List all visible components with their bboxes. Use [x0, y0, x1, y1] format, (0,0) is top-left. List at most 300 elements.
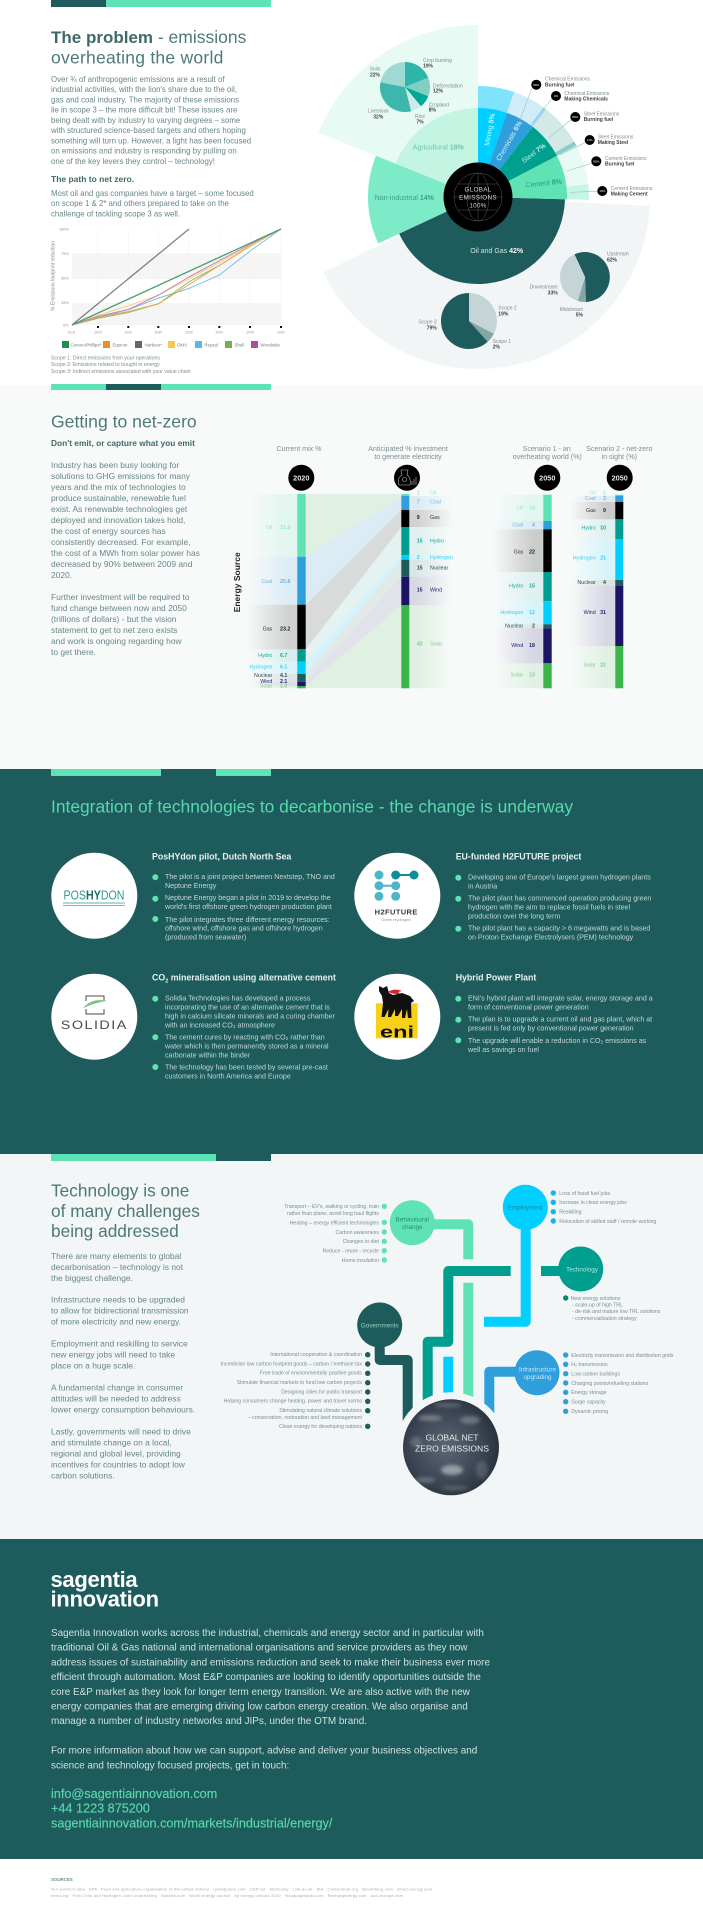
text block: net-zero: to get there. [51, 647, 96, 657]
text block: about sagentia: manage a number of industry networks and JIPs, under the OTM brand. [51, 1716, 367, 1727]
labels: scenario 1 values: Nuclear [505, 623, 524, 629]
labels: 2020 values: Solar [260, 684, 273, 690]
text block: problem intro: on emissions and industry is responding by pulling on [51, 147, 237, 156]
labels: scenario 1 values: 18 [529, 643, 535, 649]
bullets: hybrid power plant: well as savings on fuel [467, 1046, 539, 1054]
title: the problem: - emissions [153, 27, 247, 47]
node: infrastructure upgrading: upgrading [523, 1374, 552, 1381]
heading: PosHYdon: PosHYdon pilot, Dutch North Sea [152, 851, 291, 861]
contact details: +44 1223 875200 [51, 1802, 150, 1816]
text block: challenges: new energy jobs will need to take [51, 1350, 175, 1360]
labels: scenario 2 values: 3 [603, 496, 606, 502]
labels: scenario 1 values: Oil [517, 505, 523, 511]
bullets: CO2 mineralisation: customers in North America and Europe [165, 1072, 291, 1080]
text block: scope definitions: Scope 2: Emissions related to bought in energy [51, 362, 160, 368]
sources [51, 1877, 433, 1898]
bullets: CO2 mineralisation: The technology has been tested by several pre-cast [165, 1063, 328, 1071]
text block: challenges: A fundamental change in consumer [51, 1382, 183, 1392]
centre: global emissions globe [444, 162, 512, 232]
node: governments: Governments [361, 1322, 399, 1329]
labels: scenario 1 values: Coal [512, 522, 523, 528]
list: infrastructure upgrading: Charging points/refueling stations [571, 1381, 649, 1387]
labels: 2020 values: 6.7 [280, 653, 287, 659]
line chart: emissions footprint reduction targets: 2040 [216, 330, 223, 334]
labels: investment values: Coal [430, 499, 441, 505]
icon: investment money bag and bars [398, 470, 416, 485]
leader lines and emission callouts: Cement Emissions [611, 186, 653, 192]
pie: agricultural breakdown: Soils [370, 67, 381, 73]
labels: investment values: 15 [417, 565, 423, 571]
column: scenario 2 [615, 495, 623, 688]
leader lines and emission callouts: Steel Emissions [598, 135, 634, 141]
leader lines and emission callouts: Steel Emissions [584, 112, 620, 118]
pie: scope split: Scope 3 [418, 319, 437, 325]
pie: agricultural breakdown: 7% [416, 120, 424, 126]
bullets: H2FUTURE: production over the long term [468, 912, 560, 920]
column headers [277, 445, 652, 461]
column headers: to generate electricity [374, 453, 442, 461]
labels: investment values: Hydrogen [430, 555, 453, 561]
sector: mining [478, 108, 507, 197]
list: infrastructure upgrading: Dynamic pricing [571, 1409, 608, 1415]
leader lines and emission callouts: Making Cement [611, 191, 648, 197]
list: technology: - de-risk and mature low TRL solutions [572, 1309, 661, 1315]
logo: H2FUTURE: H2FUTURE [375, 907, 417, 916]
bullets: hybrid power plant: present is fed only by conventional power generation [468, 1025, 634, 1033]
year badges: 2050 [612, 473, 628, 482]
text block: about sagentia: Sagentia Innovation works across the industrial, chemicals and energy sector and in particular with [51, 1628, 484, 1639]
bands: 2020 [256, 494, 298, 688]
text block: challenges: Employment and reskilling to service [51, 1339, 188, 1349]
text block: about sagentia: For more information about how we can support, advise and deliver your business objectives and [51, 1746, 477, 1757]
labels: scenario 1 values: 4 [532, 522, 535, 528]
line chart: emissions footprint reduction targets: 2050 [277, 330, 285, 334]
bullets: PosHYdon: world's first offshore green hydrogen production plant [164, 903, 332, 911]
contact details: info@sagentiainnovation.com [51, 1787, 217, 1801]
sources: SOURCES [51, 1877, 73, 1882]
list: technology: - scale-up of high TRL [572, 1302, 623, 1308]
centre: global emissions globe: GLOBAL [464, 186, 492, 193]
labels: 2020 values: Gas [263, 626, 273, 632]
labels: scenario 2 values: Solar [583, 662, 596, 668]
line chart: emissions footprint reduction targets: 75% [61, 252, 69, 256]
sector: cement [478, 156, 567, 199]
sources: irena.org Fuel Cells and Hydrogen Joint Undertaking Statista.com World energy council bp energy outlook 2020 Visualcapitalist.com Rechargenergy.com acci-europe.com [51, 1893, 404, 1898]
line chart: emissions footprint reduction targets: Harbour* [144, 342, 162, 347]
outer ring sectors [478, 86, 589, 200]
bullets: CO2 mineralisation: with an increased CO₂ atmosphere [164, 1021, 275, 1029]
list: governments: Free trade of environmentally positive goods [260, 1371, 362, 1377]
text block: problem intro: being dealt with by industry to varying degrees – some [51, 116, 241, 125]
labels: 2020 values: Nuclear [254, 673, 273, 679]
bullets: PosHYdon: The pilot integrates three different energy resources: [165, 916, 330, 924]
subheading: don't emit: Don't emit, or capture what you emit [51, 438, 195, 448]
labels: scenario 1 values: 13 [529, 673, 535, 679]
pie: oil and gas value chain [530, 252, 629, 319]
leader lines and emission callouts: 15% [599, 189, 606, 193]
labels: scenario 1 values: 15 [529, 583, 535, 589]
leader lines and emission callouts: Chemical Emissions [545, 77, 591, 83]
bands: scenario 2 [576, 496, 616, 688]
list: governments: – conservation, restoration and land management [248, 1415, 363, 1421]
pie: scope split [418, 293, 517, 351]
column headers: Current mix % [277, 445, 322, 453]
list: behavioural change: Transport – EV's, walking or cycling, train [284, 1204, 379, 1210]
bullets: PosHYdon: Neptune Energy [165, 882, 217, 890]
bullets: PosHYdon: (produced from seawater) [165, 934, 246, 942]
text block: challenges: to allow for bidirectional transmission [51, 1306, 189, 1316]
sector: agricultural [395, 108, 478, 197]
pipes [380, 1207, 580, 1430]
text block: problem intro: with structured science-based targets and others hoping [50, 126, 246, 135]
bands: investment [410, 496, 446, 688]
bullets: PosHYdon: Neptune Energy began a pilot in 2019 to develop the [165, 894, 331, 902]
list: infrastructure upgrading [563, 1352, 674, 1415]
list: technology: New energy solutions [571, 1296, 621, 1302]
pie: agricultural breakdown: 8% [429, 108, 436, 114]
node: behavioural change [390, 1200, 435, 1245]
flows: 2020 mix to investment [306, 494, 401, 688]
list: governments: International cooperation & coordination [270, 1352, 362, 1358]
leader lines and emission callouts: 4% [554, 94, 558, 98]
pie: scope split: 19% [498, 311, 509, 317]
node: infrastructure upgrading [514, 1350, 560, 1395]
labels: 2020 values: 1.0 [280, 684, 287, 690]
text block: challenges: lower energy consumption behaviours. [51, 1404, 195, 1414]
line chart: emissions footprint reduction targets: 50% [61, 276, 69, 280]
line chart: emissions footprint reduction targets: 2045 [246, 330, 254, 334]
text block: challenges: decarbonisation – technology is not [51, 1262, 184, 1272]
pie: oil and gas value chain: 33% [548, 290, 558, 296]
list: governments: Stimulate financial markets to fund low carbon projects [237, 1380, 362, 1386]
centre: global emissions globe: EMISSIONS [459, 194, 497, 201]
list: infrastructure upgrading: Low carbon buildings [571, 1372, 620, 1378]
labels: 2020 values: Hydro [258, 653, 272, 659]
heading: CO2 mineralisation: mineralisation using alternative cement [168, 973, 336, 983]
labels: scenario 2 values: 10 [600, 526, 606, 532]
text block: net-zero: deployed and innovation takes hold, [51, 515, 185, 525]
globe: global net zero emissions: ZERO EMISSIONS [415, 1444, 489, 1454]
line chart: emissions footprint reduction targets: Shell [234, 342, 244, 347]
sector labels: Cement 8% [525, 179, 563, 189]
sector: non-industrial [368, 156, 478, 243]
bullets: hybrid power plant: ENI's hybrid plant will integrate solar, energy storage and a [468, 995, 653, 1003]
bullets: H2FUTURE: in Austria [468, 883, 497, 891]
sector labels: Chemicals 6% [495, 119, 524, 162]
panel: hybrid power plant [354, 972, 653, 1060]
text block: net-zero: the cost of energy sources has [51, 526, 166, 536]
labels: 2020 values: Coal [261, 579, 272, 585]
accent bar: section 2 [51, 384, 271, 390]
labels: scenario 1 values: 14 [529, 505, 535, 511]
logo: PosHYdon [51, 853, 137, 939]
pie: scope split: 2% [493, 345, 500, 351]
leader lines and emission callouts: Making Steel [598, 140, 629, 146]
leader lines and emission callouts: Burning fuel [605, 161, 635, 167]
labels: investment values: 42 [417, 642, 423, 648]
labels: 2020 values: 4.1 [280, 673, 287, 679]
sector: steel [478, 127, 557, 197]
bullets: H2FUTURE: Developing one of Europe's largest green hydrogen plants [468, 874, 651, 882]
title: the problem [51, 27, 247, 67]
text block: challenges: carbon solutions. [51, 1470, 115, 1480]
node: governments [357, 1302, 402, 1348]
list: governments: Clean energy for developing nations [279, 1424, 362, 1430]
line chart: emissions footprint reduction targets: Equinor [112, 342, 128, 347]
line chart: emissions footprint reduction targets: Woodside [260, 342, 281, 347]
text block: problem intro: Over ¾ of anthropogenic emissions are a result of [51, 75, 225, 84]
heading: the path to net zero: The path to net zero. [51, 174, 134, 184]
text block: about sagentia: energy companies that are emerging driving low carbon energy creation. We also organise and [51, 1702, 468, 1712]
list: infrastructure upgrading: Electricity transmission and distribution grids [571, 1353, 674, 1359]
bullets: CO2 mineralisation: Solidia Technologies has developed a process [165, 995, 311, 1003]
bullets: PosHYdon: offshore wind, offshore gas and offshore hydrogen [165, 925, 323, 933]
logo: PosHYdon: POSHYDON [64, 888, 124, 902]
logo: sagentia innovation [50, 1567, 159, 1612]
text block: about sagentia: science and technology focused projects, get in touch: [51, 1760, 289, 1771]
pie: agricultural breakdown: Deforestation [433, 83, 463, 89]
bullets: PosHYdon: The pilot is a joint project between Nextstep, TNO and [165, 873, 335, 881]
list: governments: Incentivise low carbon footprint goods – carbon / methane tax [221, 1361, 362, 1367]
bullets: CO2 mineralisation: The cement cures by reacting with CO₂ rather than [165, 1034, 325, 1042]
text block: challenges: place on a huge scale. [51, 1361, 135, 1371]
text block: about sagentia: efficient through automation. Most E&P companies are looking to identify opportunities outside the [51, 1672, 481, 1683]
labels: scenario 1 values: Hydro [509, 583, 523, 589]
list: infrastructure upgrading: H₂ transmission [571, 1362, 608, 1368]
bullets: CO2 mineralisation [152, 995, 336, 1080]
list: behavioural change: Reduce - reuse - recycle [322, 1248, 379, 1254]
pie: scope split: 79% [427, 325, 437, 331]
labels: scenario 1 values: Gas [514, 549, 524, 555]
bullets: PosHYdon [152, 873, 335, 942]
list: behavioural change: rather than plane, avoid long haul flights [287, 1211, 379, 1217]
labels: investment values: Oil [430, 491, 436, 497]
pie: agricultural breakdown: 22% [370, 72, 381, 78]
labels: 2020 values: Hydrogen [249, 665, 272, 671]
text block: net-zero: produce sustainable, renewable fuel [51, 493, 186, 503]
axis label: energy source: Energy Source [232, 552, 242, 612]
leader lines and emission callouts: 96% [533, 83, 540, 87]
line chart: emissions footprint reduction targets [51, 228, 285, 348]
leader lines and emission callouts: Making Chemicals [564, 97, 608, 103]
logo: eni: eni [380, 1022, 414, 1042]
labels: 2020 values: 23.2 [280, 626, 290, 632]
node: technology: Technology [566, 1267, 599, 1274]
labels: scenario 1 values: Solar [511, 673, 524, 679]
panel: H2FUTURE [354, 851, 651, 942]
text block: problem intro: gas and coal industry. The majority of these emissions [51, 95, 239, 104]
leader lines and emission callouts: Cement Emissions [605, 156, 647, 162]
labels: scenario 1 values: 22 [529, 549, 535, 555]
pie: agricultural breakdown [368, 58, 463, 126]
labels: scenario 2 values: 9 [603, 508, 606, 514]
accent bar: section 4 [51, 1154, 271, 1161]
pie: oil and gas value chain: Midstream [560, 307, 583, 313]
text block: problem intro: industrial activities, with the lion's share due to the oil, [51, 85, 237, 94]
labels: scenario 2 values: 22 [600, 662, 606, 668]
leader lines and emission callouts: 89% [572, 115, 579, 119]
text block: net-zero: fund change between now and 2050 [51, 603, 187, 613]
leader lines and emission callouts: Chemical Emissions [564, 91, 610, 97]
sources: Our world in data EPA Food and agriculture organisation of the united nations rystadplane.com CDP.net McKinsey LSE.ac.uk IEA Carbonbrief.org Bloomberg.com smart-energy.com [51, 1886, 433, 1891]
bullets: hybrid power plant: The plan is to upgrade a current oil and gas plant, which at [468, 1016, 652, 1024]
sector labels [375, 112, 563, 255]
node: employment [503, 1185, 548, 1230]
sector labels: Steel 7% [521, 142, 548, 165]
text block: challenges: and stimulate change on a local, [51, 1437, 172, 1447]
line chart: emissions footprint reduction targets: Repsol [204, 342, 218, 347]
labels: investment values: Wind [430, 587, 442, 593]
bullets: hybrid power plant: The upgrade will enable a reduction in CO₂ emissions as [468, 1037, 647, 1045]
top accent bar [51, 0, 271, 7]
text block: challenges: Infrastructure needs to be upgraded [51, 1295, 185, 1305]
title: integration of technologies: Integration of technologies to decarbonise - the change is underway [51, 797, 573, 817]
node: technology [558, 1246, 603, 1292]
leader lines and emission callouts: Burning fuel [545, 83, 575, 89]
labels: 2020 values: 6.1 [280, 665, 287, 671]
labels: investment values: Hydro [430, 539, 444, 545]
line chart: emissions footprint reduction targets: 2030 [155, 330, 162, 334]
text block: net-zero: the cost of a MWh from solar power has [51, 548, 200, 558]
bands: scenario 1 [500, 494, 544, 688]
leader lines and emission callouts: 11% [587, 138, 593, 142]
text block: net-zero: (trillions of dollars) - but the vision [51, 614, 177, 624]
pie: agricultural breakdown: Crop burning [423, 58, 452, 64]
text block: challenges: There are many elements to global [51, 1251, 181, 1261]
labels: 2020 values: 31.8 [280, 525, 290, 531]
sector labels: Agricultural 18% [413, 144, 465, 151]
sector labels: Non-industrial 14% [375, 195, 435, 202]
labels: scenario 2 values: 31 [600, 610, 606, 616]
column headers: Scenario 2 - net-zero [586, 445, 652, 453]
labels: scenario 1 values [500, 505, 535, 679]
list: governments [221, 1352, 370, 1430]
pie: agricultural breakdown: 12% [433, 89, 444, 95]
list: employment: Loss of fossil fuel jobs [559, 1191, 610, 1197]
list: behavioural change: Changes to diet [343, 1239, 380, 1245]
pie: agricultural breakdown: 19% [423, 64, 434, 70]
column headers: overheating world (%) [513, 453, 582, 461]
labels: investment values [417, 491, 453, 648]
bullets: CO2 mineralisation: high in calcium silicate minerals and a curing chamber [165, 1013, 336, 1021]
list: employment: Reskilling [559, 1210, 582, 1216]
sector: oil and gas [399, 197, 565, 284]
list: employment: Relocation of skilled staff / remote working [559, 1219, 656, 1225]
text block: net-zero: years and the mix of technologies to [51, 482, 186, 492]
line chart: emissions footprint reduction targets: ConocoPhillips* [70, 342, 102, 347]
line chart: emissions footprint reduction targets: 2025 [125, 330, 132, 334]
pie: oil and gas value chain: 62% [607, 257, 618, 263]
title: technology is one of many challenges: being addressed [51, 1221, 179, 1241]
labels: 2020 values: 2.1 [280, 679, 287, 685]
labels: scenario 2 values: Hydro [582, 526, 596, 532]
text block: challenges: attitudes will be needed to address [51, 1393, 181, 1403]
text block: challenges: the biggest challenge. [51, 1273, 133, 1283]
bullets: CO2 mineralisation: carbonate within the binder [165, 1052, 251, 1060]
year badges: 2050 [539, 473, 555, 482]
labels: investment values: 2 [417, 555, 420, 561]
line chart: emissions footprint reduction targets: 2020 [94, 330, 102, 334]
labels: scenario 1 values: Wind [511, 643, 523, 649]
list: behavioural change: Home insulation [342, 1258, 379, 1264]
text block: problem intro: something will turn up. However, a light has been focused [51, 136, 251, 145]
line chart: emissions footprint reduction targets: % Emissions footprint reduction [51, 241, 57, 311]
diagram: routes to global net zero [221, 1185, 674, 1502]
centre: global emissions globe: 100% [469, 202, 487, 209]
bullets: CO2 mineralisation: incorporating the use of an alternative cement that is [165, 1004, 330, 1012]
bullets: hybrid power plant [455, 995, 653, 1054]
panel: CO2 mineralisation [51, 973, 336, 1080]
text block: net-zero: consistently decreased. For example, [51, 537, 190, 547]
text block: problem intro: lie in scope 3 – the more difficult bit! These issues are [51, 106, 238, 115]
text block: net-zero: statement to get to net zero exists [51, 625, 177, 635]
labels: 2020 values [249, 525, 290, 690]
ring around earth [396, 1392, 506, 1502]
list: governments: Designing cities for public transport [281, 1389, 363, 1395]
heading: H2FUTURE: EU-funded H2FUTURE project [456, 851, 581, 861]
pie: agricultural breakdown: Cropland [429, 102, 449, 108]
line chart: emissions footprint reduction targets: 0% [63, 324, 69, 328]
list: behavioural change: Heating – energy efficient technologies [290, 1220, 379, 1226]
pie: agricultural breakdown: 32% [373, 115, 384, 121]
node: behavioural change: change [402, 1224, 423, 1231]
pie: oil and gas value chain: Downstream [530, 285, 558, 291]
leader lines and emission callouts: 85% [593, 159, 600, 163]
text block: challenges: regional and global level, providing [51, 1448, 181, 1458]
sunburst chart: global emissions [319, 25, 653, 369]
heading: hybrid power plant: Hybrid Power Plant [456, 972, 536, 982]
text block: net-zero: decreased by 90% between 2009 and [51, 559, 193, 569]
labels: scenario 2 values: 1 [603, 491, 606, 497]
bullets: hybrid power plant: form of conventional power generation [468, 1004, 589, 1012]
line chart: emissions footprint reduction targets: 100% [59, 228, 69, 232]
pie: agricultural breakdown: Livestock [368, 109, 389, 115]
text block: net-zero: and work is ongoing regarding how [51, 636, 183, 646]
line chart: emissions footprint reduction targets: 2018 [67, 330, 75, 334]
logo: sagentia innovation: innovation [50, 1586, 159, 1612]
text block: net-zero: exist. As renewable technologies get [51, 504, 188, 514]
line chart: emissions footprint reduction targets: 2035 [185, 330, 193, 334]
text block: net-zero: solutions to GHG emissions for many [51, 471, 191, 481]
list: behavioural change [284, 1204, 387, 1264]
labels: 2020 values: Wind [260, 679, 272, 685]
node: employment: Employment [508, 1204, 543, 1212]
pie: scope split: Scope 2 [498, 306, 517, 312]
sector: chemicals [478, 113, 533, 197]
labels: investment values: Solar [430, 642, 443, 648]
globe: global net zero emissions [403, 1399, 499, 1495]
leader lines and emission callouts: Burning fuel [584, 117, 614, 123]
text block: challenges: of more electricity and new energy. [51, 1317, 181, 1327]
bullets: H2FUTURE: on Proton Exchange Electrolysers (PEM) technology [468, 934, 634, 942]
text block: net-zero: Industry has been busy looking for [51, 460, 179, 470]
labels: scenario 2 values [573, 491, 606, 668]
pie: oil and gas value chain: 5% [576, 313, 584, 319]
column headers: Scenario 1 - an [523, 445, 571, 453]
list: governments: Helping consumers change heating, power and travel norms [224, 1399, 362, 1405]
labels: scenario 2 values: Wind [584, 610, 596, 616]
column: anticipated investment [401, 494, 409, 688]
bullets: H2FUTURE: The pilot plant has a capacity > 6 megawatts and is based [468, 925, 650, 933]
accent bars: section 3 [51, 769, 271, 776]
list: technology [563, 1295, 661, 1322]
year badges: 2020 [293, 473, 309, 482]
leader lines and emission callouts [520, 77, 653, 197]
labels: scenario 2 values: Coal [585, 496, 596, 502]
logo: eni [354, 974, 440, 1060]
big wedge: oil and gas background [323, 197, 650, 369]
labels: scenario 1 values: 2 [532, 623, 535, 629]
